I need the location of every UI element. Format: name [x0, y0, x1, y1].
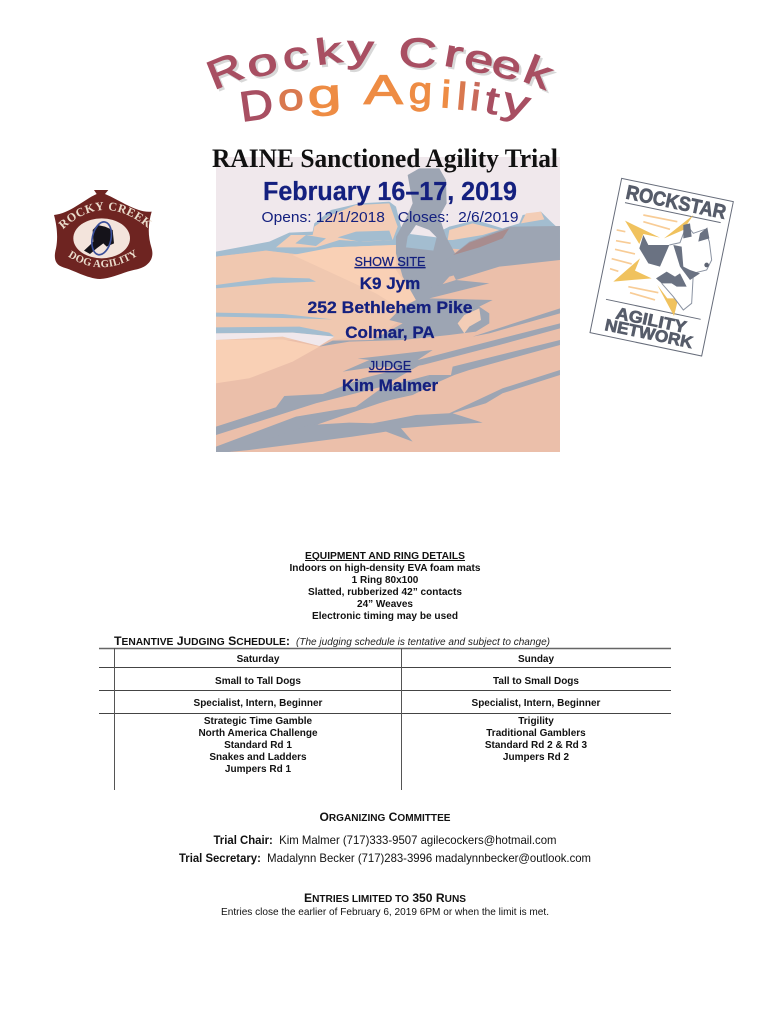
heading: Dog Agility: y	[499, 79, 534, 126]
text: opening and closing dates: Opens: 12/1/2018 Closes: 2/6/2019	[262, 210, 518, 226]
text: judge name: Kim Malmer	[342, 376, 439, 395]
column: Saturday: Saturday	[237, 654, 280, 665]
column: Saturday: Specialist, Intern, Beginner	[194, 698, 323, 709]
heading: Rocky Creek	[201, 27, 560, 98]
logo: Rocky Creek Dog Agility word art: r	[444, 34, 469, 79]
logo: Rocky Creek round badge	[54, 190, 152, 279]
icon: leaping dog	[639, 223, 712, 310]
note: schedule disclaimer: (The judging schedule is tentative and subject to change)	[296, 636, 550, 648]
label: judge: JUDGE	[369, 359, 411, 373]
illustration: distant mesas	[216, 202, 560, 260]
icon: speed lines	[610, 215, 677, 300]
column: Sunday: Trigility	[518, 716, 554, 727]
heading: Dog Agility: g	[408, 70, 433, 112]
heading: Dog Agility: o	[277, 75, 305, 119]
heading: organizing committee: ORGANIZING COMMITTEE	[320, 810, 451, 824]
illustration: long arch shadows	[216, 280, 560, 452]
logo: Rockstar Agility Network	[590, 178, 733, 356]
heading: Rocky Creek: C	[397, 29, 438, 77]
logo: Rocky Creek Dog Agility word art: c	[282, 36, 313, 81]
column: Saturday: Standard Rd 1	[224, 740, 292, 751]
heading: Dog Agility: t	[482, 79, 502, 123]
column: Saturday: Small to Tall Dogs	[215, 676, 301, 687]
text block: equipment and ring details: Electronic timing may be used	[312, 611, 458, 622]
logo: Rocky Creek Dog Agility word art	[201, 27, 562, 131]
illustration: rock arch	[396, 168, 503, 300]
text block: equipment and ring details: Indoors on high-density EVA foam mats	[290, 563, 481, 574]
logo text: Network: NETWORK	[603, 315, 695, 352]
heading: trial dates: February 16–17, 2019	[263, 178, 517, 206]
logo: Rocky Creek Dog Agility word art: e	[489, 43, 529, 92]
panel: desert arch illustration	[216, 157, 560, 452]
illustration: arch opening	[406, 225, 437, 251]
column: Saturday: North America Challenge	[198, 728, 318, 739]
badge text: Rocky Creek: ROCKY CREEK	[58, 202, 152, 230]
illustration: desert ground	[216, 245, 560, 452]
heading: entries limit: ENTRIES LIMITED TO 350 RUNS	[304, 891, 466, 905]
badge text: Dog Agility: DOG AGILITY	[68, 249, 136, 268]
illustration: grey boulder	[446, 226, 560, 280]
illustration: dog jumping through tire	[73, 218, 130, 258]
column: Saturday: Jumpers Rd 1	[225, 764, 292, 775]
heading: Dog Agility	[237, 67, 534, 131]
icon: yellow star	[613, 215, 693, 316]
text: venue street: 252 Bethlehem Pike	[308, 298, 472, 317]
column: Saturday: Strategic Time Gamble	[204, 716, 313, 727]
heading: Dog Agility: i	[440, 73, 452, 116]
heading: Rocky Creek: o	[242, 38, 282, 87]
heading: Rocky Creek: R	[201, 44, 249, 98]
heading: Rocky Creek: c	[279, 33, 311, 79]
text: trial chair: Trial Chair: Kim Malmer (717)333-9507 agilecockers@hotmail.com	[214, 833, 556, 847]
logo text: Rockstar: ROCKSTAR	[624, 182, 728, 224]
label: show site: SHOW SITE	[354, 255, 426, 269]
heading: Dog Agility: l	[455, 75, 468, 118]
heading: Rocky Creek: e	[461, 35, 498, 83]
column: Sunday: Specialist, Intern, Beginner	[472, 698, 601, 709]
text block: equipment and ring details: Slatted, rubberized 42” contacts	[308, 587, 462, 598]
text block: equipment and ring details	[289, 549, 481, 623]
illustration: small sunlit rock	[458, 308, 481, 333]
column: Sunday: Standard Rd 2 & Rd 3	[485, 740, 588, 751]
column: Sunday	[472, 654, 601, 763]
heading: tentative judging schedule: TENANTIVE JUDGING SCHEDULE:	[114, 634, 290, 648]
text block: equipment and ring details: 1 Ring 80x100	[352, 575, 419, 586]
text block: equipment and ring details: 24” Weaves	[357, 599, 413, 610]
logo: Rocky Creek Dog Agility word art: y	[349, 29, 377, 73]
heading: Rocky Creek: y	[347, 27, 374, 70]
logo text: Agility: AGILITY	[614, 304, 688, 337]
heading: Dog Agility: A	[364, 67, 403, 112]
column: Sunday: Sunday	[518, 654, 554, 665]
heading: Dog Agility: D	[237, 80, 276, 131]
text: entries closing note: Entries close the earlier of February 6, 2019 6PM or when the limit is met.	[221, 906, 549, 918]
heading: Rocky Creek: k	[313, 30, 345, 73]
text: venue city: Colmar, PA	[345, 323, 435, 342]
column: Sunday: Tall to Small Dogs	[493, 676, 579, 687]
table: judging schedule	[99, 648, 671, 790]
heading: Rocky Creek: k	[518, 47, 560, 98]
logo: Rocky Creek Dog Agility word art: o	[244, 41, 284, 89]
heading: Dog Agility: i	[468, 75, 483, 119]
text block: equipment and ring details: EQUIPMENT AND RING DETAILS	[305, 551, 465, 562]
heading: Dog Agility: g	[306, 70, 342, 117]
text: trial secretary: Trial Secretary: Madalynn Becker (717)283-3996 madalynnbecker@outlook.com	[179, 851, 591, 865]
heading: Rocky Creek: e	[487, 40, 527, 90]
column: Saturday	[194, 654, 323, 775]
text: venue name: K9 Jym	[360, 274, 420, 293]
logo: Rocky Creek Dog Agility word art: C	[400, 31, 440, 79]
column: Sunday: Traditional Gamblers	[486, 728, 586, 739]
logo: Rocky Creek Dog Agility word art: k	[316, 33, 347, 75]
column: Saturday: Snakes and Ladders	[209, 752, 307, 763]
heading: Rocky Creek: r	[441, 31, 466, 76]
logo: Rocky Creek Dog Agility word art: R	[203, 46, 252, 101]
logo: Rocky Creek Dog Agility word art: e	[463, 37, 501, 85]
logo: Rocky Creek Dog Agility word art: k	[520, 49, 562, 101]
title: RAINE Sanctioned Agility Trial	[212, 144, 558, 173]
column: Sunday: Jumpers Rd 2	[503, 752, 570, 763]
